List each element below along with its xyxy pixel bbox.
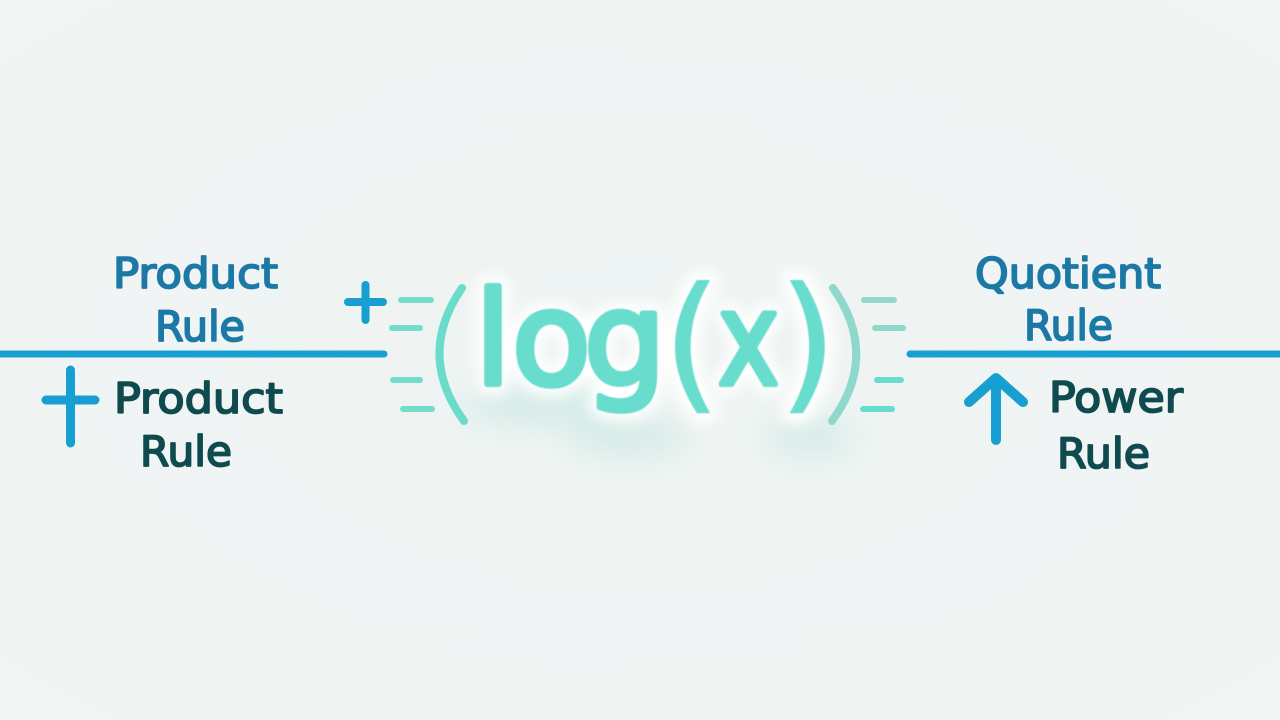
central formula: log(x) xyxy=(439,256,856,428)
formula glow: g xyxy=(584,265,666,415)
heading: quotient rule: Rule xyxy=(1024,301,1113,350)
heading: product rule: Rule xyxy=(155,302,245,351)
divider line right xyxy=(910,350,1280,358)
label: product rule xyxy=(114,374,283,476)
label: power rule: Power xyxy=(1049,373,1184,422)
heading: quotient rule: Quotient xyxy=(975,249,1161,298)
panel: product rule xyxy=(0,249,384,476)
left motion dashes xyxy=(392,300,432,409)
formula text: ) xyxy=(779,256,837,428)
label: power rule xyxy=(1049,373,1184,478)
formula glow: ) xyxy=(779,256,837,428)
heading: quotient rule xyxy=(975,249,1161,350)
label: product rule: Product xyxy=(114,374,283,423)
label: product rule: Rule xyxy=(140,427,232,476)
heading: product rule xyxy=(113,249,278,351)
formula glow xyxy=(475,256,837,428)
formula text: o xyxy=(512,265,591,415)
formula text: ( xyxy=(663,256,721,428)
icon: large plus xyxy=(46,370,95,443)
formula glow: x xyxy=(718,265,779,415)
outer left parenthesis xyxy=(439,288,464,421)
label: power rule: Rule xyxy=(1057,429,1150,478)
soft shadow under formula xyxy=(460,385,855,456)
heading: product rule: Product xyxy=(113,249,278,298)
formula glow: ( xyxy=(663,256,721,428)
formula glow: l xyxy=(475,265,511,415)
divider line left xyxy=(0,350,384,358)
formula text xyxy=(475,256,837,428)
panel: quotient and power rules xyxy=(910,249,1280,478)
formula text: x xyxy=(718,265,779,415)
icon: small plus xyxy=(348,285,383,320)
formula text: l xyxy=(475,265,511,415)
formula glow: o xyxy=(512,265,591,415)
outer right parenthesis xyxy=(832,288,856,421)
right motion dashes xyxy=(863,300,903,409)
icon: up arrow xyxy=(969,378,1023,440)
formula text: g xyxy=(584,265,666,415)
